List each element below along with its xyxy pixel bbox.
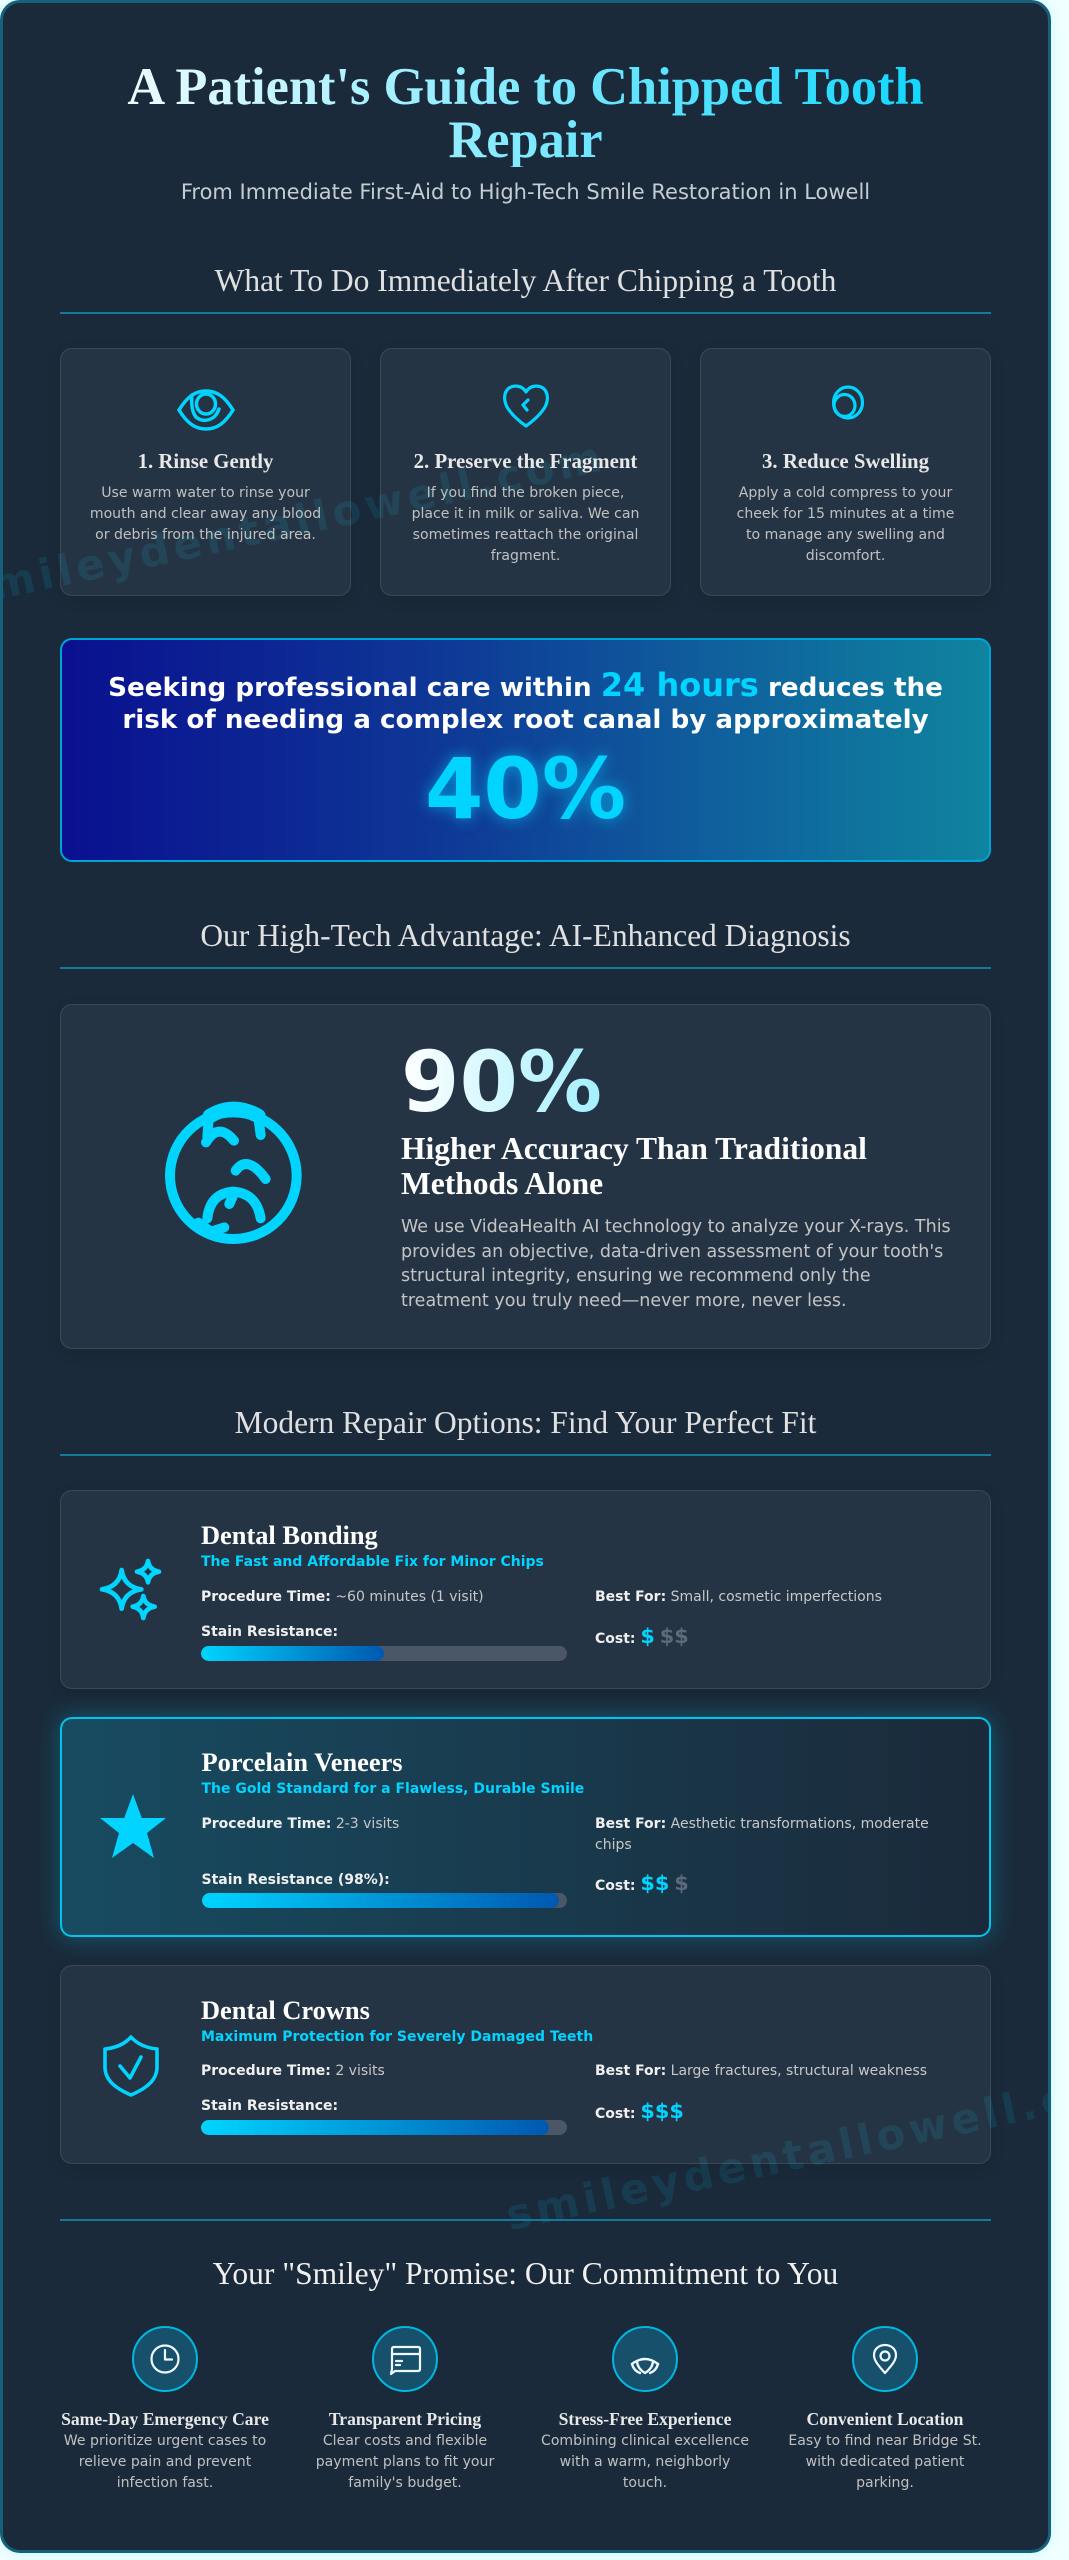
procedure time: Procedure Time: 2-3 visits	[202, 1816, 399, 1832]
stain resistance label: Stain Resistance:	[201, 2098, 338, 2114]
AI description: structural integrity, ensuring we recommend only the	[401, 1266, 871, 1286]
promise: location	[788, 2326, 982, 2491]
banner text: risk of needing a complex root canal by approximately	[122, 705, 929, 735]
AI heading	[401, 1131, 867, 1201]
section heading: repair options: Modern Repair Options: Find Your Perfect Fit	[235, 1405, 816, 1440]
promise text: with a warm, neighborly	[560, 2454, 730, 2470]
icon: map pin	[852, 2326, 918, 2392]
icon: clock	[132, 2326, 198, 2392]
icon: shield	[103, 2035, 159, 2097]
panel: dental bonding	[60, 1490, 991, 1689]
step text	[90, 485, 321, 543]
AI description	[401, 1217, 951, 1311]
big number: 90%: 90%	[401, 1033, 602, 1131]
panel: dental crowns	[60, 1965, 991, 2164]
panel: AI diagnosis	[60, 1004, 991, 1349]
option subtitle: Maximum Protection for Severely Damaged Teeth	[201, 2029, 593, 2045]
promise text: infection fast.	[117, 2475, 213, 2491]
step title: 1. Rinse Gently	[138, 450, 273, 473]
cost: Cost: $ $$	[595, 1624, 689, 1648]
step title: 3. Reduce Swelling	[762, 450, 929, 473]
stain resistance label: Stain Resistance:	[201, 1624, 338, 1640]
promise text	[316, 2433, 494, 2491]
panel: step 3	[700, 348, 991, 596]
option subtitle: The Gold Standard for a Flawless, Durable Smile	[202, 1781, 584, 1797]
promise text: Clear costs and flexible	[323, 2433, 487, 2449]
procedure time: Procedure Time: ~60 minutes (1 visit)	[201, 1589, 484, 1605]
step text: mouth and clear away any blood	[90, 506, 321, 522]
promise text: We prioritize urgent cases to	[64, 2433, 266, 2449]
icon: handshake	[612, 2326, 678, 2392]
promise text	[64, 2433, 266, 2491]
promise text	[541, 2433, 749, 2491]
icon: swelling rings	[832, 385, 864, 420]
title: Repair	[448, 111, 603, 169]
promise: stress free	[541, 2326, 749, 2491]
promise title: Convenient Location	[807, 2409, 963, 2429]
option title: Dental Bonding	[201, 1520, 378, 1550]
big number: 40%: 40%	[425, 740, 626, 838]
icon: eye	[177, 389, 235, 431]
step text: cheek for 15 minutes at a time	[737, 506, 954, 522]
section heading: first aid: What To Do Immediately After Chipping a Tooth	[215, 263, 836, 298]
title	[60, 61, 991, 167]
stain resistance bar	[201, 2120, 567, 2135]
AI description: treatment you truly need—never more, never less.	[401, 1291, 847, 1311]
AI heading: Higher Accuracy Than Traditional	[401, 1131, 867, 1166]
panel: porcelain veneers	[60, 1717, 991, 1937]
step text: place it in milk or saliva. We can	[412, 506, 639, 522]
step text: discomfort.	[806, 548, 885, 564]
best for: Best For: Aesthetic transformations, moderate	[595, 1816, 929, 1832]
promise text: payment plans to fit your	[316, 2454, 494, 2470]
title: A Patient's Guide to Chipped Tooth	[127, 58, 924, 116]
icon: chipped heart	[503, 384, 549, 428]
promise text: touch.	[623, 2475, 667, 2491]
promise text: Combining clinical excellence	[541, 2433, 749, 2449]
step text: Apply a cold compress to your	[739, 485, 952, 501]
section heading: promise: Your "Smiley" Promise: Our Commitment to You	[213, 2256, 838, 2291]
step text	[412, 485, 639, 564]
step text: Use warm water to rinse your	[101, 485, 310, 501]
promise title: Same-Day Emergency Care	[61, 2409, 269, 2429]
promise text: relieve pain and prevent	[79, 2454, 251, 2470]
cost: Cost: $$$	[595, 2099, 684, 2123]
step text: to manage any swelling and	[746, 527, 945, 543]
stain resistance bar	[201, 1646, 567, 1661]
icon: pricing card	[372, 2326, 438, 2392]
subtitle: From Immediate First-Aid to High-Tech Smile Restoration in Lowell	[181, 180, 870, 204]
promise: pricing	[316, 2326, 494, 2491]
banner text: Seeking professional care within 24 hours reduces the	[108, 666, 943, 704]
step text: fragment.	[491, 548, 560, 564]
panel: 24 hours statistic banner	[60, 638, 991, 862]
step title: 2. Preserve the Fragment	[414, 450, 637, 473]
stain resistance bar	[202, 1893, 566, 1908]
option subtitle: The Fast and Affordable Fix for Minor Chips	[201, 1554, 544, 1570]
panel: step 2	[380, 348, 671, 596]
promise text: Easy to find near Bridge St.	[788, 2433, 982, 2449]
best for: chips	[595, 1837, 632, 1853]
stain resistance label: Stain Resistance (98%):	[202, 1872, 390, 1888]
best for: Best For: Large fractures, structural weakness	[595, 2063, 927, 2079]
promise text	[788, 2433, 982, 2491]
procedure time: Procedure Time: 2 visits	[201, 2063, 385, 2079]
promise text: with dedicated patient	[806, 2454, 964, 2470]
step text: sometimes reattach the original	[413, 527, 638, 543]
cost: Cost: $$ $	[595, 1871, 689, 1895]
step text: If you find the broken piece,	[427, 485, 624, 501]
big number: 90%	[401, 1032, 961, 1132]
AI description: We use VideaHealth AI technology to analyze your X-rays. This	[401, 1217, 951, 1237]
best for	[595, 1816, 929, 1853]
promise title: Transparent Pricing	[329, 2409, 481, 2429]
promise: emergency care	[61, 2326, 269, 2491]
banner text	[108, 666, 943, 735]
best for: Best For: Small, cosmetic imperfections	[595, 1589, 882, 1605]
AI description: provides an objective, data-driven assessment of your tooth's	[401, 1242, 943, 1262]
step text: or debris from the injured area.	[95, 527, 316, 543]
promise text: parking.	[856, 2475, 914, 2491]
option title: Dental Crowns	[201, 1995, 370, 2025]
option title: Porcelain Veneers	[202, 1747, 403, 1777]
icon: star	[100, 1794, 166, 1858]
section heading: AI: Our High-Tech Advantage: AI-Enhanced Diagnosis	[200, 918, 851, 953]
AI heading: Methods Alone	[401, 1166, 603, 1201]
icon: AI tooth scan	[165, 1102, 302, 1244]
promise text: family's budget.	[348, 2475, 462, 2491]
step text	[737, 485, 954, 564]
icon: sparkles	[100, 1558, 162, 1620]
promise title: Stress-Free Experience	[559, 2409, 731, 2429]
panel: step 1	[60, 348, 351, 596]
